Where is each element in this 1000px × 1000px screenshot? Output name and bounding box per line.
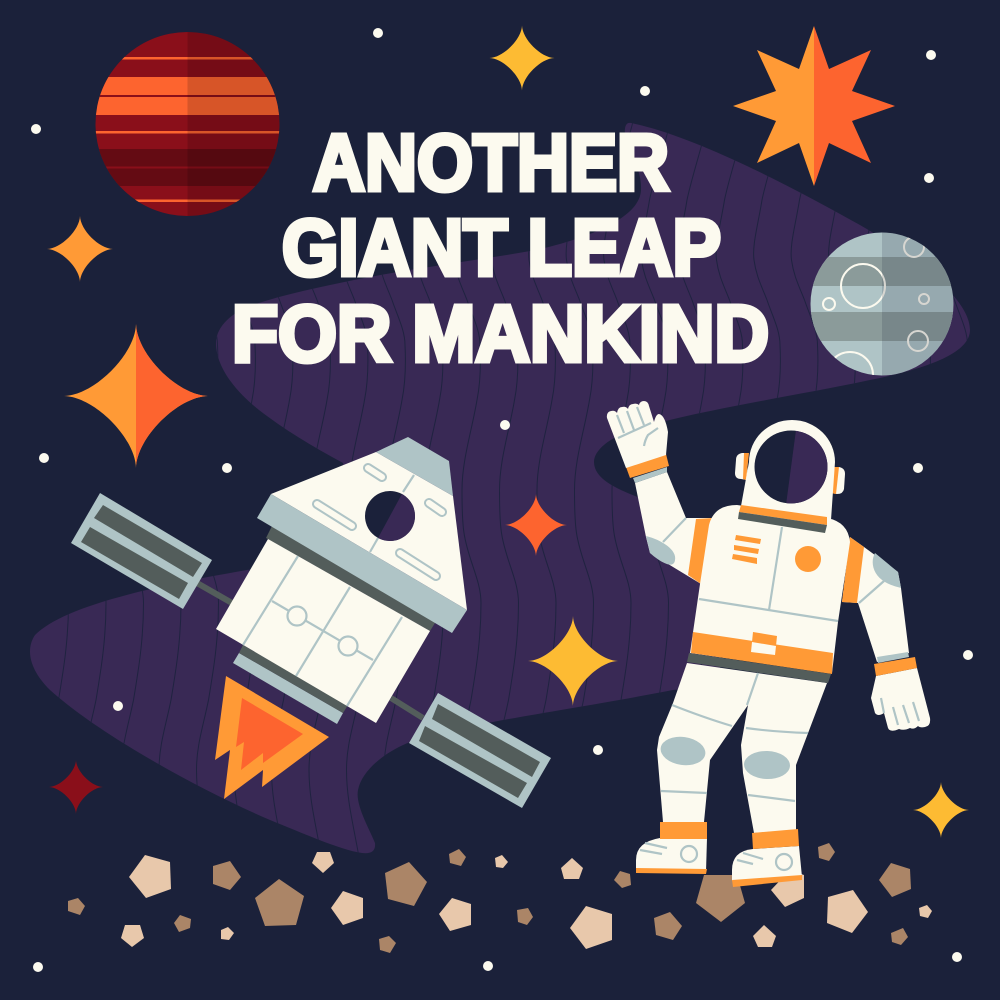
ship nose cone <box>257 437 467 633</box>
title: GIANT LEAP <box>282 203 721 292</box>
star: eight-point burst <box>733 26 895 186</box>
right hand <box>871 652 930 731</box>
neck ring <box>739 505 827 525</box>
rocks field <box>68 843 932 953</box>
title: ANOTHER <box>313 118 669 207</box>
pill vents <box>317 468 442 576</box>
flame <box>215 676 329 799</box>
title: FOR MANKIND <box>232 289 769 378</box>
star: large orange <box>64 324 208 468</box>
right arm <box>842 537 909 662</box>
belt <box>687 632 833 683</box>
planet: grey cratered moon <box>810 232 954 376</box>
ship porthole <box>365 491 415 541</box>
star: yellow right <box>913 782 969 838</box>
astronaut <box>607 401 930 887</box>
left solar panel <box>71 493 212 609</box>
right solar panel <box>409 693 551 808</box>
star: large yellow <box>528 616 618 706</box>
right boot <box>732 829 802 887</box>
ship body <box>216 520 440 723</box>
chest stripes <box>732 535 761 564</box>
raised left arm <box>635 472 713 584</box>
chest badge <box>795 546 821 572</box>
star: red-orange <box>505 494 567 556</box>
star: yellow top <box>490 25 554 90</box>
helmet <box>738 420 835 533</box>
spaceship <box>71 401 930 887</box>
planet: red striped <box>90 30 288 220</box>
ship lower engine base <box>233 645 348 724</box>
purple nebula swoosh <box>30 110 974 860</box>
solar panel struts <box>197 583 423 718</box>
helmet ears <box>735 453 845 494</box>
title <box>232 118 769 378</box>
star: dark red <box>49 760 103 814</box>
star: small orange <box>47 216 113 282</box>
torso <box>687 505 850 683</box>
legs <box>657 663 827 833</box>
left boot <box>636 822 707 874</box>
raised hand <box>607 401 669 483</box>
